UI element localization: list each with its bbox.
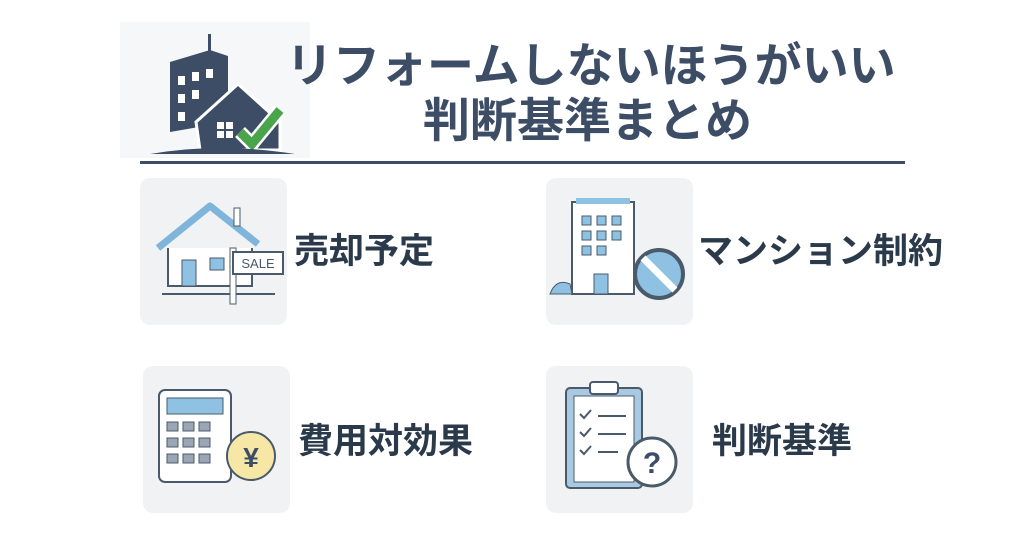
- panel: 判断基準: [546, 366, 852, 513]
- panel: マンション制約: マンション制約: [698, 232, 943, 271]
- icon: house for sale: [140, 178, 287, 325]
- panel: マンション制約: [546, 178, 943, 325]
- panel: 判断基準: 判断基準: [712, 422, 852, 461]
- icon: clipboard with question: ?: [643, 447, 661, 480]
- icon: calculator with yen coin: ¥: [243, 442, 259, 473]
- panel: 売却予定: 売却予定: [294, 232, 434, 271]
- title: [286, 39, 896, 147]
- title: 判断基準まとめ: [423, 94, 752, 147]
- icon: house for sale: SALE: [241, 256, 275, 271]
- icon: clipboard with question: [546, 366, 693, 513]
- logo: building with checkmark: [120, 22, 310, 158]
- panel: 売却予定: [140, 178, 434, 325]
- panel: 費用対効果: [143, 366, 473, 513]
- icon: calculator with yen coin: [143, 366, 290, 513]
- icon: building with prohibited sign: [546, 178, 693, 325]
- title: リフォームしないほうがいい: [286, 39, 896, 92]
- panel: 費用対効果: 費用対効果: [298, 422, 473, 461]
